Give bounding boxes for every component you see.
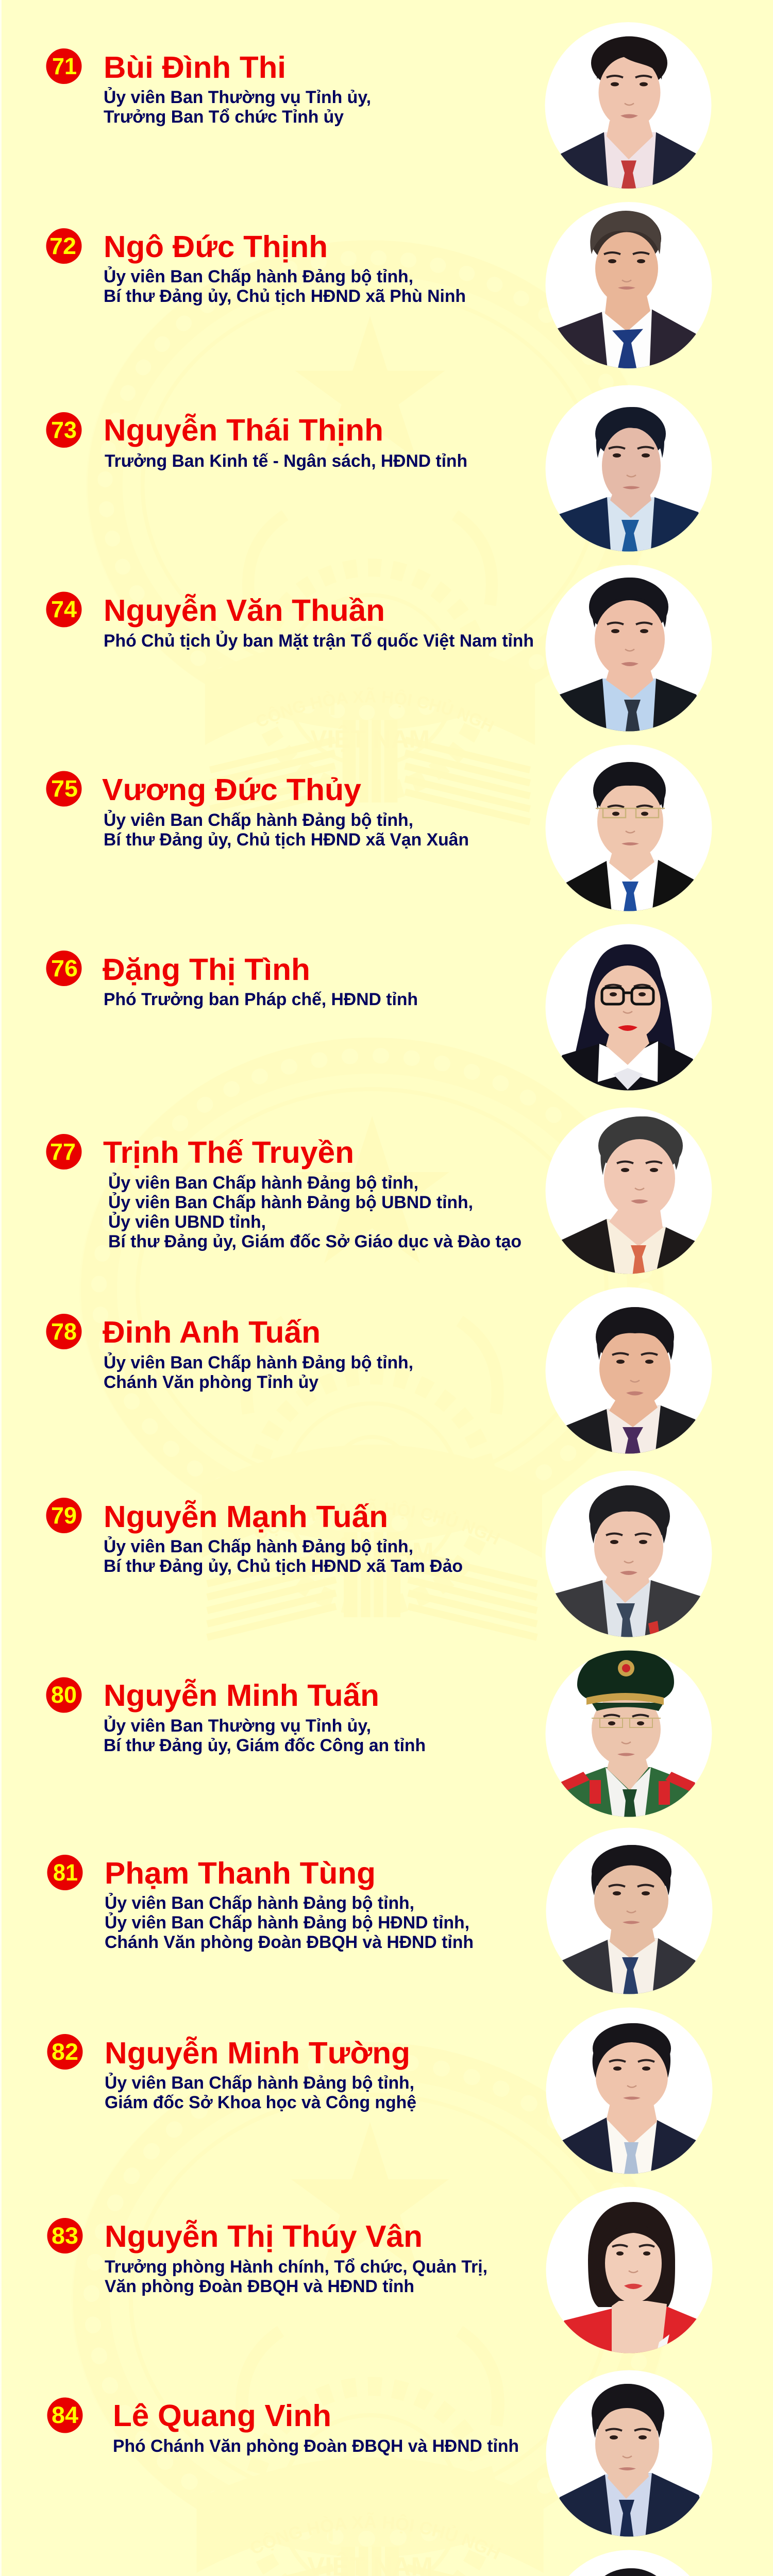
portrait 83 <box>544 2187 714 2360</box>
badge 72 <box>46 228 81 264</box>
badge 79: 79 <box>51 1502 77 1529</box>
name 72: Ngô Đức Thịnh <box>104 230 328 264</box>
role 79: Bí thư Đảng ủy, Chủ tịch HĐND xã Tam Đảo <box>104 1556 463 1576</box>
badge 74 <box>46 591 81 628</box>
role 73: Trưởng Ban Kinh tế - Ngân sách, HĐND tỉnh <box>105 451 467 471</box>
name 79: Nguyễn Mạnh Tuấn <box>104 1500 388 1534</box>
watermark emblem 2 <box>136 1087 609 1640</box>
badge 73: 73 <box>51 417 77 443</box>
badge 71: 71 <box>52 53 77 79</box>
badge 81: 81 <box>53 1859 78 1886</box>
role 81: Chánh Văn phòng Đoàn ĐBQH và HĐND tỉnh <box>105 1933 474 1952</box>
badge 82: 82 <box>52 2039 78 2065</box>
role 83: Trưởng phòng Hành chính, Tổ chức, Quản Trị, <box>105 2257 488 2277</box>
watermark emblem 2: VIỆT NAM <box>311 1537 433 1566</box>
role 80 <box>104 1716 426 1755</box>
portrait 85 <box>569 2550 690 2576</box>
role 77: Ủy viên Ban Chấp hành Đảng bộ UBND tỉnh, <box>108 1193 473 1212</box>
badge 72: 72 <box>49 233 76 259</box>
role 82: Ủy viên Ban Chấp hành Đảng bộ tỉnh, <box>105 2073 414 2093</box>
role 79: Ủy viên Ban Chấp hành Đảng bộ tỉnh, <box>104 1537 413 1556</box>
watermark emblem 1: CỘNG HÒA XÃ HỘI CHỦ NGHĨA <box>258 703 493 732</box>
role 77: Ủy viên UBND tỉnh, <box>108 1212 266 1232</box>
portrait 78 <box>544 1287 714 1461</box>
role 84: Phó Chánh Văn phòng Đoàn ĐBQH và HĐND tỉnh <box>113 2436 519 2456</box>
badge 75 <box>46 771 81 807</box>
badge 83 <box>47 2218 82 2253</box>
role 72: Ủy viên Ban Chấp hành Đảng bộ tỉnh, <box>104 267 413 286</box>
portrait 71 <box>543 22 713 196</box>
role 75: Bí thư Đảng ủy, Chủ tịch HĐND xã Vạn Xuân <box>104 830 469 850</box>
name 82: Nguyễn Minh Tường <box>105 2036 410 2070</box>
badge 77 <box>46 1134 81 1170</box>
badge 82 <box>47 2034 82 2070</box>
portrait 80 <box>544 1650 714 1824</box>
badge 84 <box>47 2398 82 2433</box>
entry 80 <box>46 1650 714 1824</box>
entry 75 <box>46 745 714 918</box>
role 82: Giám đốc Sở Khoa học và Công nghệ <box>105 2093 416 2112</box>
role 74: Phó Chủ tịch Ủy ban Mặt trận Tổ quốc Việt Nam tỉnh <box>104 631 534 651</box>
role 78: Chánh Văn phòng Tỉnh ủy <box>104 1372 318 1392</box>
name 81: Phạm Thanh Tùng <box>105 1856 376 1890</box>
role 77 <box>108 1173 522 1251</box>
name 74: Nguyễn Văn Thuần <box>104 594 385 628</box>
entry 74 <box>46 565 714 738</box>
portrait 82 <box>544 2007 714 2181</box>
badge 84: 84 <box>52 2402 78 2428</box>
watermark emblem 3 <box>129 2093 604 2576</box>
badge 77: 77 <box>50 1139 76 1165</box>
entry 82 <box>47 2007 714 2181</box>
entry 73 <box>46 385 714 558</box>
entry 71 <box>46 22 713 196</box>
entry 78 <box>46 1287 714 1461</box>
role 77: Ủy viên Ban Chấp hành Đảng bộ tỉnh, <box>108 1173 418 1193</box>
role 83 <box>105 2257 488 2296</box>
name 83: Nguyễn Thị Thúy Vân <box>105 2219 423 2253</box>
badge 83: 83 <box>52 2223 78 2249</box>
role 78: Ủy viên Ban Chấp hành Đảng bộ tỉnh, <box>104 1353 413 1372</box>
badge 79 <box>46 1498 81 1533</box>
portrait 75 <box>544 745 714 918</box>
portrait 73 <box>544 385 714 558</box>
entry 79 <box>46 1470 714 1644</box>
role 80: Bí thư Đảng ủy, Giám đốc Công an tỉnh <box>104 1736 426 1755</box>
entry 76 <box>46 924 714 1097</box>
name 84: Lê Quang Vinh <box>113 2399 331 2433</box>
watermark emblem 3: CỘNG HÒA XÃ HỘI CHỦ NGHĨA <box>252 2529 499 2560</box>
badge 76: 76 <box>51 955 78 981</box>
role 76: Phó Trưởng ban Pháp chế, HĐND tỉnh <box>104 990 418 1009</box>
role 71 <box>104 88 371 127</box>
watermark emblem 1: VIỆT NAM <box>310 725 430 753</box>
portrait 74 <box>544 565 714 738</box>
role 81 <box>105 1893 474 1952</box>
role 83: Văn phòng Đoàn ĐBQH và HĐND tỉnh <box>105 2277 414 2296</box>
name 75: Vương Đức Thủy <box>102 773 361 807</box>
entry 81 <box>47 1828 714 2001</box>
watermark emblem 2: CỘNG HÒA XÃ HỘI CHỦ NGHĨA <box>257 1515 499 1545</box>
name 71: Bùi Đình Thi <box>104 50 286 84</box>
portrait 84 <box>544 2370 714 2544</box>
role 79 <box>104 1537 463 1576</box>
entry 77 <box>46 1108 714 1281</box>
role 80: Ủy viên Ban Thường vụ Tỉnh ủy, <box>104 1716 371 1736</box>
role 72: Bí thư Đảng ủy, Chủ tịch HĐND xã Phù Ninh <box>104 286 466 306</box>
badge 78 <box>46 1314 81 1349</box>
watermark emblem 1 <box>141 289 590 825</box>
name 73: Nguyễn Thái Thịnh <box>104 413 383 447</box>
role 77: Bí thư Đảng ủy, Giám đốc Sở Giáo dục và Đào tạo <box>108 1232 522 1251</box>
entry 83 <box>47 2187 714 2360</box>
badge 73 <box>46 412 81 448</box>
entry 84 <box>47 2370 714 2544</box>
entry 85 <box>569 2550 690 2576</box>
role 71: Ủy viên Ban Thường vụ Tỉnh ủy, <box>104 88 371 107</box>
role 75: Ủy viên Ban Chấp hành Đảng bộ tỉnh, <box>104 810 413 830</box>
badge 71 <box>46 48 81 84</box>
role 72 <box>104 267 466 306</box>
badge 78: 78 <box>51 1318 77 1345</box>
name 76: Đặng Thị Tình <box>103 953 310 987</box>
role 78 <box>104 1353 413 1392</box>
badge 80: 80 <box>51 1682 77 1708</box>
role 82 <box>105 2073 416 2112</box>
role 75 <box>104 810 469 850</box>
badge 81 <box>47 1855 82 1890</box>
portrait 79 <box>544 1470 714 1644</box>
badge 74: 74 <box>51 596 77 622</box>
name 78: Đinh Anh Tuấn <box>103 1315 321 1349</box>
portrait 81 <box>544 1828 714 2001</box>
name 80: Nguyễn Minh Tuấn <box>104 1679 379 1713</box>
badge 75: 75 <box>51 775 78 802</box>
portrait 72 <box>544 202 714 375</box>
portrait 76 <box>544 924 714 1097</box>
badge 80 <box>46 1677 81 1713</box>
role 81: Ủy viên Ban Chấp hành Đảng bộ HĐND tỉnh, <box>105 1913 469 1933</box>
badge 76 <box>46 951 81 986</box>
name 77: Trịnh Thế Truyền <box>103 1136 354 1170</box>
role 71: Trưởng Ban Tổ chức Tỉnh ủy <box>104 107 344 127</box>
portrait 77 <box>544 1108 714 1281</box>
role 81: Ủy viên Ban Chấp hành Đảng bộ tỉnh, <box>105 1893 414 1913</box>
entry 72 <box>46 202 714 375</box>
